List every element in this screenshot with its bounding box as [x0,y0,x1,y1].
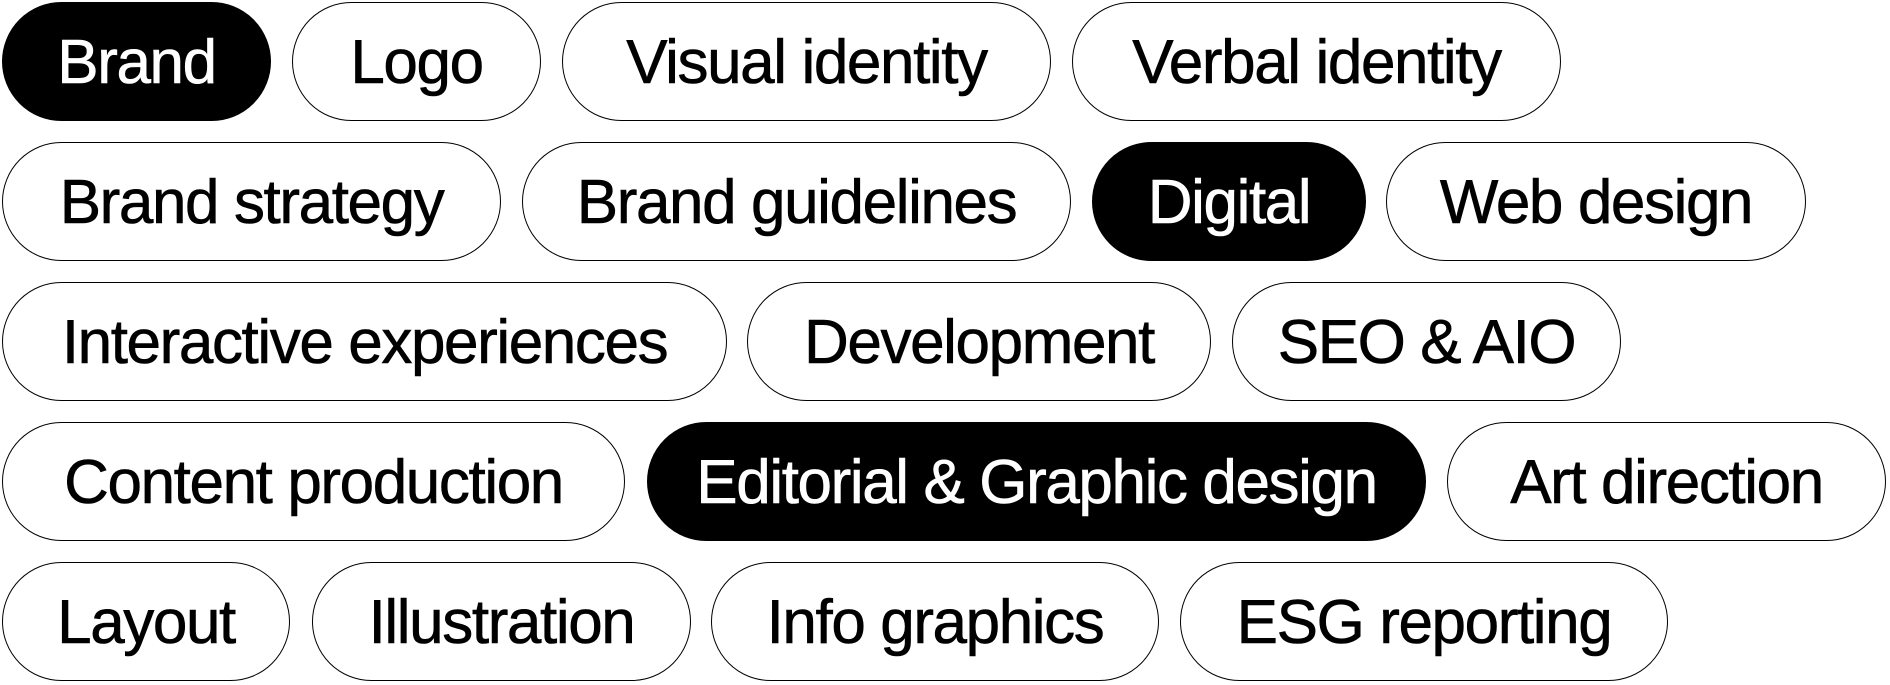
pill: Interactive experiences [2,282,727,401]
pill: Content production: Content production [64,448,563,517]
pill: Development [747,282,1211,401]
pill: Art direction [1447,422,1886,541]
pill: SEO & AIO: SEO & AIO [1278,308,1575,377]
pill: SEO & AIO [1232,282,1621,401]
pill: Layout: Layout [57,588,235,657]
pill: Digital [1092,142,1366,261]
pill: Visual identity [562,2,1051,121]
pill: Digital: Digital [1148,168,1310,237]
pill: Info graphics [711,562,1159,681]
pill: ESG reporting [1180,562,1668,681]
pill: Layout [2,562,290,681]
pill: Verbal identity [1072,2,1561,121]
pill: Brand strategy: Brand strategy [60,168,443,237]
pill: Brand strategy [2,142,501,261]
pill: Brand guidelines [522,142,1071,261]
pill: Development: Development [804,308,1154,377]
pill: Web design: Web design [1440,168,1752,237]
pill: Art direction: Art direction [1510,448,1823,517]
pill: Verbal identity: Verbal identity [1132,28,1501,97]
pill: Brand: Brand [57,28,216,97]
pill: ESG reporting: ESG reporting [1237,588,1611,657]
pill: Editorial & Graphic design: Editorial & Graphic design [696,448,1377,517]
pill: Content production [2,422,625,541]
pill: Logo [292,2,541,121]
pill: Interactive experiences: Interactive experiences [62,308,667,377]
pill: Illustration: Illustration [369,588,634,657]
pill: Logo: Logo [350,28,483,97]
pill: Visual identity: Visual identity [626,28,987,97]
pill: Brand [2,2,271,121]
pill: Illustration [312,562,691,681]
pill: Info graphics: Info graphics [767,588,1103,657]
pill: Editorial & Graphic design [647,422,1426,541]
pill: Web design [1386,142,1806,261]
pill: Brand guidelines: Brand guidelines [577,168,1016,237]
